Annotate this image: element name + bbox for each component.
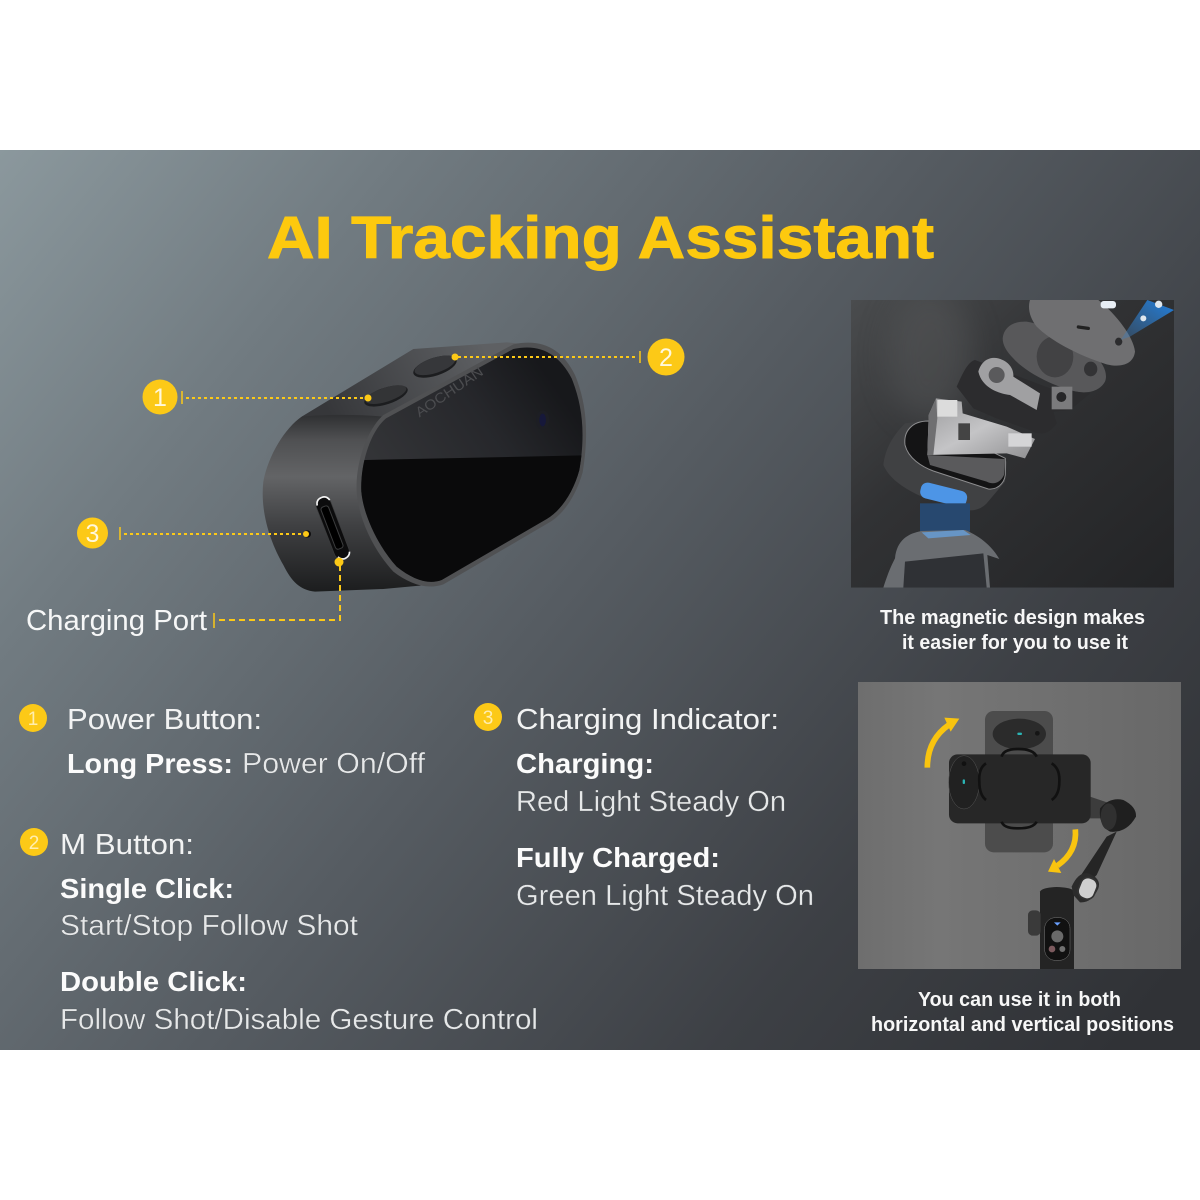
charging indicator light — [304, 530, 311, 538]
badge 1 — [19, 704, 47, 732]
photo panel: horizontal and vertical positions — [858, 682, 1181, 969]
text block: power button: Long Press: — [67, 748, 233, 779]
button 1 — [362, 381, 410, 411]
text block: charging indicator: Charging Indicator: — [516, 704, 779, 736]
photo caption: magnetic design — [880, 607, 1145, 654]
background panel — [0, 150, 1200, 1050]
callout 3 — [77, 518, 309, 548]
charging port label and leader — [26, 558, 344, 637]
callout 1 — [142, 380, 372, 414]
text block: power button: Power Button: — [67, 704, 262, 736]
photo caption: magnetic design: The magnetic design makes — [880, 607, 1145, 629]
charging port — [314, 495, 352, 562]
blue projection beam — [1121, 300, 1174, 340]
module side wall — [263, 402, 427, 592]
badge 1: 1 — [28, 709, 38, 730]
rear plate — [1003, 322, 1106, 392]
gimbal arm — [1090, 796, 1107, 818]
text block: charging indicator: Red Light Steady On — [516, 786, 786, 818]
text block: power button: Power On/Off — [242, 748, 426, 780]
text block: M button — [20, 828, 538, 1036]
charging port label and leader: Charging Port — [26, 605, 207, 637]
callout 1: 1 — [153, 384, 167, 412]
button 2 — [411, 351, 459, 382]
silver joint — [1072, 873, 1099, 902]
shell — [884, 429, 1006, 510]
text block: M button: Follow Shot/Disable Gesture Control — [60, 1004, 538, 1036]
front plate — [1029, 300, 1135, 366]
brand mark: AOCHUAN — [412, 363, 486, 420]
badge 3 — [474, 703, 502, 731]
front glass lower reflection — [361, 456, 582, 582]
photo caption: positions: You can use it in both — [918, 989, 1121, 1011]
text block: M button: Double Click: — [60, 966, 247, 997]
inner gear assembly — [956, 360, 1082, 412]
circuit board — [927, 398, 1035, 458]
photo caption: magnetic design: it easier for you to use it — [902, 632, 1128, 654]
title: AI Tracking Assistant — [267, 205, 934, 271]
badge 2: 2 — [29, 833, 39, 854]
phone: vertical — [985, 711, 1053, 852]
photo caption: positions — [871, 989, 1174, 1036]
photo panel: exploded magnetic design — [851, 288, 1174, 588]
callout 2: 2 — [659, 344, 673, 372]
phone: horizontal — [949, 754, 1091, 823]
arrow: rotate up — [927, 718, 959, 768]
text block: M button: M Button: — [60, 829, 194, 861]
front glass upper — [361, 347, 583, 582]
text block: charging indicator: Charging: — [516, 748, 654, 779]
camera lens — [536, 410, 549, 430]
blue connector beam — [920, 503, 970, 532]
photo caption: positions: horizontal and vertical positions — [871, 1014, 1174, 1036]
gimbal handle — [1040, 887, 1074, 969]
callout 2 — [452, 338, 684, 376]
text block: charging indicator — [474, 703, 814, 912]
text block: M button: Start/Stop Follow Shot — [60, 910, 358, 942]
text block: M button: Single Click: — [60, 873, 234, 904]
text block: charging indicator: Green Light Steady On — [516, 880, 814, 912]
text block: power button — [19, 704, 426, 780]
shell inner wall — [927, 455, 1005, 483]
callout 3: 3 — [86, 520, 99, 548]
gimbal mount — [883, 530, 999, 588]
module front rim — [357, 343, 586, 587]
arrow: rotate down — [1048, 829, 1076, 873]
blue magnet — [920, 482, 968, 504]
text block: charging indicator: Fully Charged: — [516, 842, 720, 873]
module top face — [302, 342, 530, 417]
badge 3: 3 — [483, 708, 493, 729]
product: AI tracking module — [263, 342, 587, 595]
badge 2 — [20, 828, 48, 856]
